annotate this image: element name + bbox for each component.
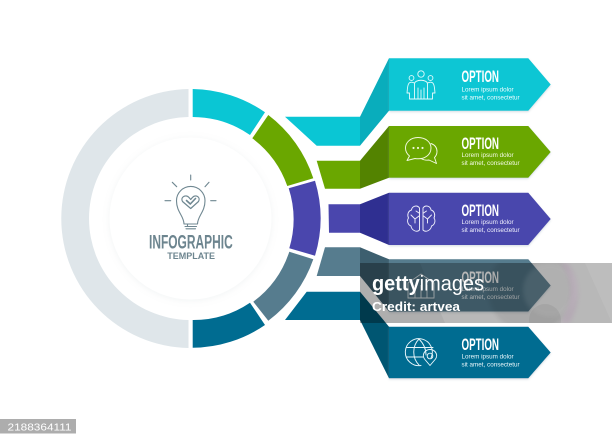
arrow panel [389, 58, 551, 111]
watermark: getty images: gettyimages [372, 272, 484, 296]
ring segment: slate [253, 252, 313, 321]
ring segment: teal [193, 89, 265, 135]
arrow panel [389, 327, 551, 378]
fold [360, 292, 389, 378]
icon: light bulb [165, 175, 216, 229]
body text: Lorem ipsum dolor [462, 286, 514, 293]
stock id tag [0, 419, 76, 434]
body text: Lorem ipsum dolor [462, 87, 514, 94]
fold [360, 126, 389, 189]
connector strip [317, 247, 360, 276]
subtitle: template: TEMPLATE [167, 251, 215, 261]
icon: building [408, 274, 434, 298]
center disc [110, 138, 272, 300]
stock id tag: 2188364111 [8, 422, 72, 434]
connector strip [285, 117, 360, 146]
body text: sit amet, consectetur [462, 294, 520, 301]
ring segment: green [252, 115, 313, 186]
option 1: teal [285, 58, 551, 146]
heading: OPTION [462, 335, 499, 354]
arrow panel [389, 193, 551, 245]
option 5: dark blue [285, 292, 551, 378]
body text: sit amet, consectetur [462, 160, 520, 167]
connector strip [328, 204, 360, 233]
body text: Lorem ipsum dolor [462, 354, 514, 360]
heading: OPTION [462, 201, 499, 220]
icon: brain [408, 206, 435, 231]
body text: sit amet, consectetur [462, 227, 520, 234]
ring segment: purple [289, 181, 321, 256]
option 2: green [317, 126, 551, 189]
icon: chat bubbles [406, 138, 437, 164]
icon: globe with pin [405, 339, 437, 366]
arrow panel [389, 126, 551, 178]
watermark: credit: Credit: artvea [372, 299, 461, 314]
body text: sit amet, consectetur [462, 95, 520, 102]
fold [360, 247, 389, 312]
panel: donut ring [61, 89, 321, 348]
body text: Lorem ipsum dolor [462, 219, 514, 226]
arrow panel [389, 259, 551, 312]
icon: people [407, 71, 435, 99]
fold [360, 193, 389, 245]
fold [360, 58, 389, 146]
connector strip [285, 292, 360, 320]
body text: Lorem ipsum dolor [462, 152, 514, 159]
body text: sit amet, consectetur [462, 362, 520, 368]
ring segment: gray half [61, 89, 188, 348]
ring segment: dark blue [193, 303, 265, 348]
heading: OPTION [462, 134, 499, 153]
watermark band [360, 263, 612, 323]
option 3: purple [328, 193, 551, 245]
option 4: slate [317, 247, 551, 312]
heading: OPTION [462, 268, 499, 287]
heading: OPTION [462, 67, 499, 86]
connector strip [317, 161, 360, 189]
title: infographic: INFOGRAPHIC [149, 231, 233, 253]
